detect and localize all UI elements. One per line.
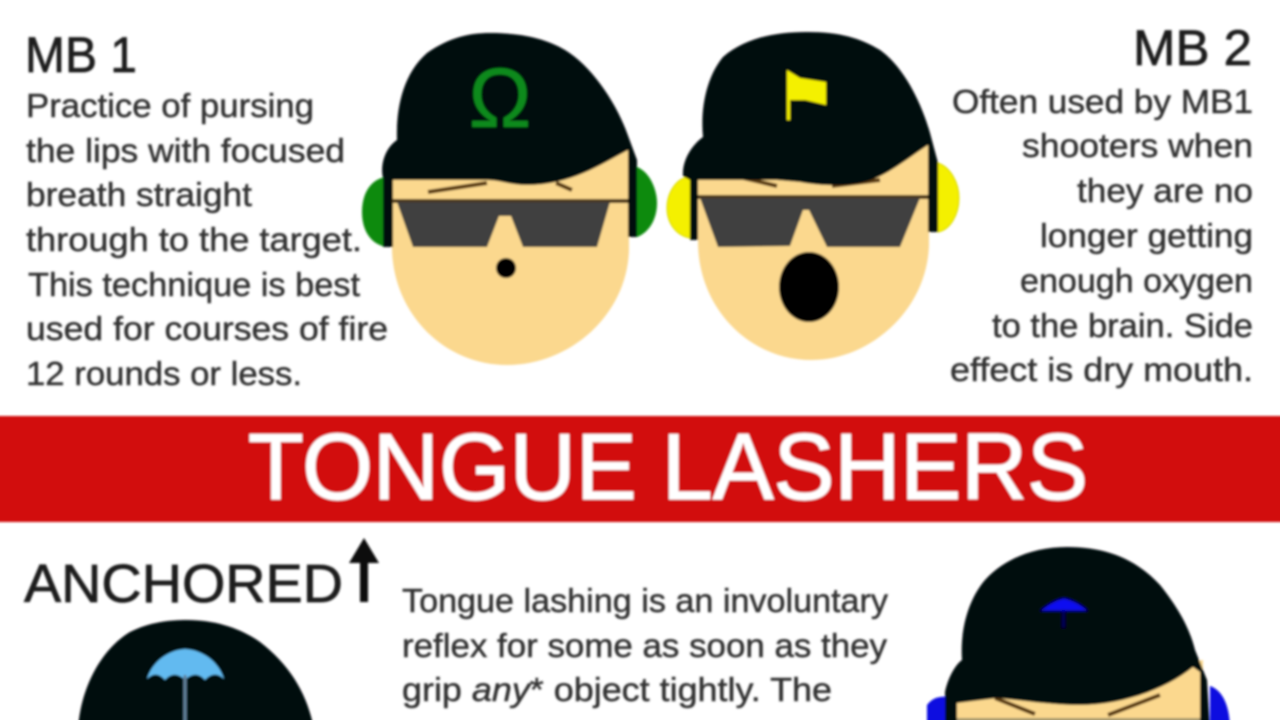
text block: MB 1 body: through to the target. xyxy=(26,221,362,258)
icon: shooter face MB 2 with yellow cap xyxy=(667,32,959,360)
icon: shooter face with blue cap xyxy=(927,547,1230,720)
heading: MB 1: MB 1 xyxy=(25,27,137,83)
text block: MB 2 body: enough oxygen xyxy=(1020,262,1253,299)
text block: MB 2 body: Often used by MB1 xyxy=(952,83,1253,120)
heading: MB 2: MB 2 xyxy=(1133,20,1252,76)
panel: MB 2 description xyxy=(950,20,1253,388)
text block: tongue lashing explanation: reflex for some as soon as they xyxy=(402,627,888,664)
heading: Anchored with arrow: ANCHORED xyxy=(24,554,343,614)
text block: MB 2 body: longer getting xyxy=(1040,217,1253,254)
text block: MB 2 body: they are no xyxy=(1077,172,1253,209)
title banner: Tongue Lashers: TONGUE LASHERS xyxy=(248,414,1088,519)
title banner: Tongue Lashers xyxy=(0,414,1280,522)
heading: Anchored with arrow xyxy=(24,538,379,614)
text block: MB 2 body: effect is dry mouth. xyxy=(950,351,1253,388)
text block: tongue lashing explanation: grip any* object tightly. The xyxy=(402,671,832,708)
text block: MB 1 body: the lips with focused xyxy=(26,132,345,169)
icon: shooter face MB 1 with green cap xyxy=(362,33,657,365)
text block: MB 2 body: shooters when xyxy=(1022,127,1253,164)
text block: MB 1 body xyxy=(26,87,388,392)
text block: MB 1 body: 12 rounds or less. xyxy=(26,355,302,392)
text block: MB 1 body: used for courses of fire xyxy=(26,310,388,347)
text block: MB 1 body: Practice of pursing xyxy=(26,87,314,124)
icon: anchored shooter face with umbrella cap xyxy=(78,620,314,720)
text block: MB 1 body: This technique is best xyxy=(28,266,360,303)
panel: MB 1 description xyxy=(25,27,388,392)
text block: tongue lashing explanation: Tongue lashing is an involuntary xyxy=(402,582,889,619)
text block: tongue lashing explanation xyxy=(402,582,889,708)
icon: shooter face MB 1 with green cap: Ω xyxy=(469,51,531,145)
text block: MB 2 body: to the brain. Side xyxy=(992,307,1253,344)
text block: MB 1 body: breath straight xyxy=(26,176,252,213)
text block: MB 2 body xyxy=(950,83,1253,388)
